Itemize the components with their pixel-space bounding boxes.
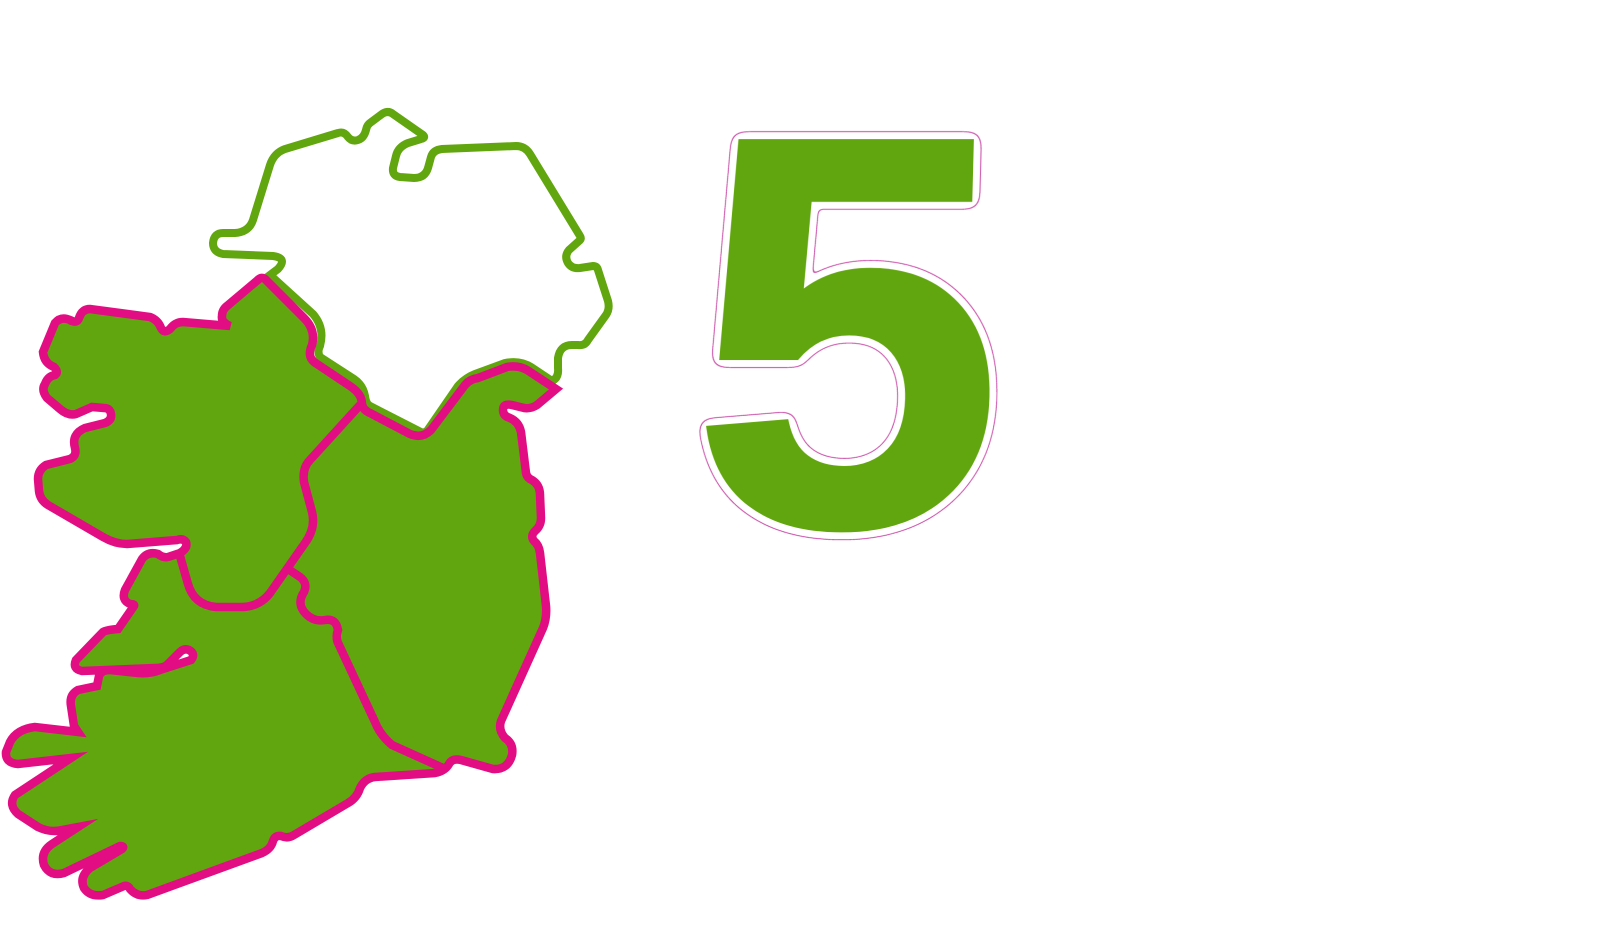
region: Northern Ireland outline [213, 112, 609, 432]
boundary: east-west province line [291, 571, 443, 768]
map of Ireland [6, 112, 609, 895]
region: Republic of Ireland landmass [6, 278, 556, 895]
number 5: 5 [687, 21, 1012, 642]
boundary: north-west province line [180, 405, 360, 607]
